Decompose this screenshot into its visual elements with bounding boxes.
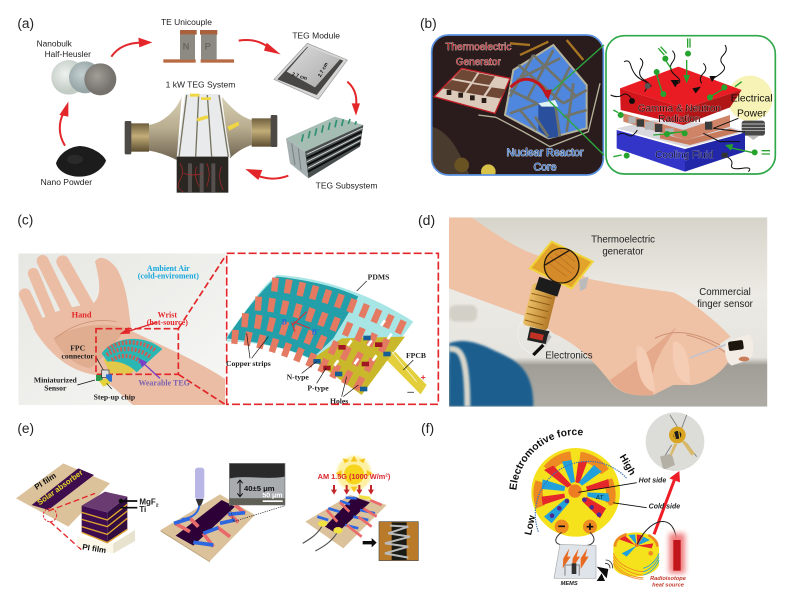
label (f): (f) [421, 420, 434, 436]
photo: round device [646, 412, 704, 471]
text: 1 kW TEG system: 1 kW TEG System [166, 79, 235, 89]
light bulb [727, 76, 773, 140]
diagram: gamma and neutron radiation on TEG [606, 36, 775, 174]
diagram: PI film with solar absorber: PI film [33, 471, 58, 492]
panel (a): TEG manufacturing cycle [17, 16, 377, 193]
text: low: Low [523, 514, 538, 536]
text: radioisotope heat source: Radioisotope [650, 576, 686, 582]
text: FPC connector [62, 344, 94, 360]
icon: sun [336, 456, 373, 492]
text: copper strips [226, 333, 271, 368]
text: holes [330, 377, 358, 405]
image: nuclear reactor core [432, 35, 603, 179]
labels: MgF2 and Ti: MgF [139, 498, 156, 507]
icon: satellite dish [597, 560, 613, 581]
text: commercial finger sensor: finger sensor [697, 299, 754, 310]
arrow: subsystem to system [245, 169, 288, 180]
icon: three discs [51, 60, 116, 95]
text: gamma neutron radiation [638, 103, 721, 125]
text: AM 1.5G: 2 [385, 473, 388, 478]
text: nuclear reactor core: Nuclear Reactor [506, 147, 584, 159]
text: PDMS: PDMS [368, 273, 389, 282]
text: nuclear reactor core: Core [533, 161, 557, 173]
labels: MgF2 and Ti: 2 [156, 502, 159, 508]
text: P-type [307, 368, 329, 393]
hot red block [620, 67, 742, 125]
text: electrical power: Power [737, 109, 767, 120]
text: nano powder: Nano Powder [41, 177, 92, 187]
text: thermoelectric generator: generator [602, 247, 644, 258]
text: electronics: Electronics [545, 350, 593, 361]
arrow: wearable TEG [139, 359, 160, 378]
panel (d): wrist thermoelectric generator [449, 217, 767, 407]
text: N-type [287, 362, 317, 381]
text: holes: Holes [330, 396, 348, 405]
panel (e): solar TEG [16, 421, 418, 562]
text: FPC connector: connector [62, 351, 94, 360]
panel (b): nuclear TEG [420, 16, 775, 179]
diagram: PI film with solar absorber [16, 463, 110, 550]
inset: device photo [379, 522, 418, 561]
arrows: sunlight [331, 485, 374, 495]
text: ambient air [138, 264, 199, 281]
icon: NP unicouple: N [183, 41, 190, 51]
wires to MEMS [556, 532, 594, 546]
callout: cold side [595, 495, 680, 510]
panel (c): wearable TEG [17, 213, 438, 408]
icon: stacked radial TEG [613, 532, 659, 579]
text: wrist hot source: Wrist [158, 310, 177, 319]
icon: nano powder pile [56, 146, 106, 177]
arrow: discs to unicouple [111, 38, 152, 57]
arrow: unicouple to module [239, 40, 281, 54]
text: electrical power: Electrical [731, 94, 773, 105]
icon: TEG subsystem [286, 117, 363, 178]
text: thermoelectric generator [445, 42, 511, 68]
text: thermoelectric generator: Generator [456, 57, 501, 68]
text: wrist hot source [147, 310, 188, 327]
text: radioisotope heat source [650, 576, 686, 589]
illustration: 1 kW TEG system [125, 94, 277, 193]
icon: radioisotope heat source [669, 533, 685, 573]
diagram: printing thermoelectric legs [161, 468, 255, 562]
text: radioisotope heat source: heat source [652, 583, 684, 589]
diagram: layer stack [77, 492, 135, 553]
labels: MgF2 and Ti: Ti [139, 505, 146, 514]
text: cooling fluid: Cooling Fluid [655, 150, 713, 161]
diagram: TEG detail: B' [312, 327, 319, 336]
diagram: TEG detail [227, 275, 427, 395]
text: electromotive force: Electromotive force [509, 430, 583, 490]
text: P-type: P-type [307, 384, 329, 393]
text: commercial finger sensor [697, 287, 754, 310]
diagram: TEG detail: + [421, 372, 426, 382]
callout: hot side: Hot side [639, 478, 666, 485]
text: FPCB [403, 351, 426, 370]
text: PDMS [357, 273, 389, 291]
diagram: TEG detail: B [282, 318, 288, 327]
arrow: powder to discs [59, 102, 68, 146]
text: N-type: N-type [287, 372, 309, 381]
callout: hot side [578, 478, 666, 492]
text: thermoelectric generator [591, 234, 655, 258]
text: gamma neutron radiation: Gamma & Neutron [638, 103, 721, 114]
text: nanobulk half-heusler: Half-Heusler [45, 49, 91, 59]
icon: NP unicouple [163, 30, 234, 63]
text: miniaturized sensor: Sensor [44, 384, 67, 393]
text: FPCB: FPCB [406, 351, 426, 360]
icon: TEG module: 2.7 cm [317, 61, 330, 78]
text: nanobulk half-heusler: Nanobulk [37, 39, 73, 49]
inset: SEM image: 50 μm [262, 493, 283, 500]
radiation particles [611, 45, 750, 172]
panel label e: (e) [17, 421, 34, 436]
text: miniaturized sensor: Miniaturized [34, 376, 78, 385]
icon: MEMS device [554, 544, 596, 578]
diagram: PI film with solar absorber: Solar absorber [36, 468, 85, 507]
text: copper strips: Copper strips [226, 359, 271, 368]
labels: MgF2 and Ti [119, 498, 159, 514]
callout lines [548, 45, 604, 155]
text: step-up chip: Step-up chip [94, 392, 135, 401]
text: ambient air: (cold-enviroment) [138, 272, 199, 281]
photo: hand with wearable TEG: Hand [72, 311, 92, 320]
thermoelectric legs [623, 113, 740, 145]
text: commercial finger sensor: Commercial [699, 287, 751, 298]
panel (f): radioisotope TEG [509, 412, 704, 589]
text: AM 1.5G: ) [388, 472, 391, 481]
text: high: High [617, 453, 637, 477]
panel label c: (c) [17, 213, 33, 228]
arrow: module to subsystem [347, 82, 360, 116]
text: TEG subsystem: TEG Subsystem [316, 181, 377, 191]
text: TEG module: TEG Module [292, 31, 340, 41]
cooling fluid block [617, 120, 745, 172]
text: wearable TEG: Wearable TEG [138, 378, 190, 387]
callout: cold side: Cold side [649, 503, 680, 510]
label (d): (d) [418, 212, 435, 228]
diagram: solar illuminated device [303, 495, 387, 551]
text: thermoelectric generator: Thermoelectric [591, 234, 655, 245]
text: ambient air: Ambient Air [147, 264, 190, 273]
callout: cold side: ΔT [595, 495, 604, 501]
inset: SEM image: 40±5 μm [244, 484, 275, 493]
wires [703, 118, 745, 142]
dashed detail frame [227, 253, 438, 404]
inset: SEM image [229, 463, 285, 522]
text: FPC connector: FPC [70, 344, 85, 353]
text: gamma neutron radiation: Radiation [658, 114, 700, 125]
dashed zoom box [96, 257, 225, 404]
arrow: black to inset [363, 538, 377, 547]
panel label a: (a) [17, 16, 34, 31]
photo: hand with wearable TEG [18, 253, 227, 408]
text: PI film under stack: PI film [82, 542, 107, 555]
text: AM 1.5G: AM 1.5G (1000 W/m [318, 472, 385, 481]
wire: thermocouple [637, 521, 677, 544]
arrow: wrist pointer [122, 322, 157, 333]
text: electrical power [731, 94, 773, 120]
text: MEMS: MEMS [561, 581, 578, 587]
wearable TEG patch [102, 339, 162, 374]
text: miniaturized sensor [34, 376, 78, 393]
arc: EMF gradient [535, 461, 627, 532]
diagram: radial TEG disc [531, 448, 620, 537]
photo: hand and wristband [449, 217, 767, 407]
icon: chips [77, 358, 112, 389]
icon: NP unicouple: P [205, 41, 211, 51]
text: wrist hot source: (hot-source) [147, 318, 188, 327]
panel label b: (b) [420, 16, 437, 31]
text: nuclear reactor core [506, 147, 584, 173]
text: TE unicouple: TE Unicouple [161, 17, 212, 27]
icon: TEG module: 2.7 cm [291, 72, 308, 82]
icon: TEG module [274, 43, 347, 99]
arrow: big red [654, 471, 680, 534]
text: thermoelectric generator: Thermoelectric [445, 42, 511, 53]
